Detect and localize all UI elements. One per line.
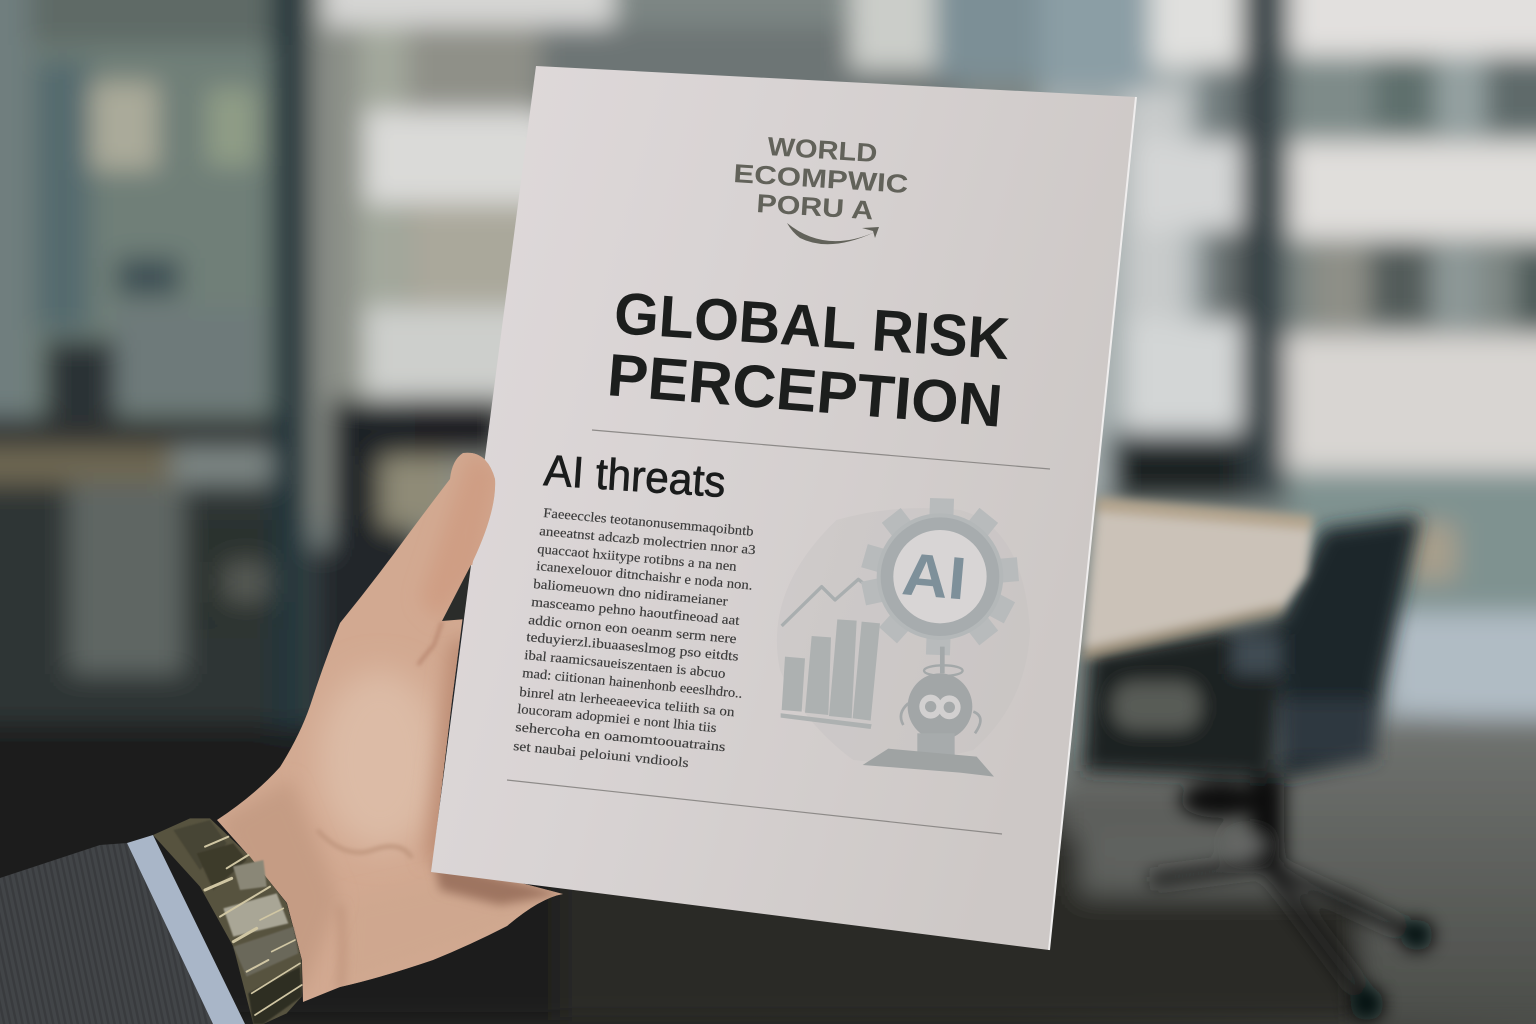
title <box>605 280 1012 440</box>
logo: WORLD <box>767 131 878 168</box>
lower rule <box>507 780 1002 834</box>
dark column <box>272 0 310 730</box>
floor <box>1060 716 1536 1024</box>
body text: quaccaot hxiitype rotibns a na nen <box>537 541 738 574</box>
subheading: AI threats <box>542 446 727 507</box>
title: GLOBAL RISK <box>612 280 1012 372</box>
body text: baliomeuown dno nidirameianer <box>533 576 729 609</box>
line chart <box>782 579 872 626</box>
body text: addic ornon eon oeanm serm nere <box>528 612 737 646</box>
body text: set naubai peloiuni vndiools <box>513 738 689 770</box>
body text: Faeeeccles teotanonusemmaqoibntb <box>543 505 754 539</box>
hand holding the report <box>217 450 563 1002</box>
right of booklet, left of column <box>1040 0 1260 500</box>
centre building <box>312 0 612 520</box>
right building <box>1290 0 1536 56</box>
body text: loucoram adopmiei e nont lhia tiis <box>517 701 717 735</box>
bar chart <box>781 619 880 729</box>
body text: sehercoha en oamomtoouatrains <box>515 719 726 754</box>
blurred chair <box>1083 516 1433 1021</box>
wristwatch <box>153 818 302 1024</box>
body text: aneeatnst adcazb molectrien nnor a3 <box>539 523 756 557</box>
gear with AI <box>861 498 1019 655</box>
body text: masceamo pehno haoutfineoad aat <box>531 594 740 628</box>
logo: PORU A <box>756 188 875 225</box>
body text: teduyierzl.ibuaaseslmog pso eitdts <box>526 629 739 664</box>
jacket sleeve <box>0 843 213 1024</box>
illustration backdrop <box>777 508 1030 762</box>
logo: ECOMPWIC <box>733 158 909 199</box>
AI illustration <box>777 498 1030 777</box>
logo <box>733 131 909 244</box>
shirt cuff <box>127 835 245 1024</box>
body text: mad: ciitionan hainenhonb eeeslhdro.. <box>522 665 743 701</box>
body text: binrel atn lerheeaeevica teliith sa on <box>519 684 735 719</box>
thumb over booklet edge <box>470 452 496 565</box>
body text <box>513 505 756 770</box>
report booklet <box>431 66 1136 950</box>
body text: ibal raamicsaueiszentaen is abcuo <box>524 647 727 681</box>
gear with AI: AI <box>900 540 969 613</box>
right column <box>1242 0 1256 500</box>
blurred table <box>1083 497 1313 660</box>
upper rule <box>592 430 1050 469</box>
booklet cover <box>431 66 1136 950</box>
left glass <box>0 0 290 440</box>
body text: icanexelouor ditnchaishr e noda non. <box>536 558 753 593</box>
robot <box>863 647 994 777</box>
title: PERCEPTION <box>605 341 1005 440</box>
